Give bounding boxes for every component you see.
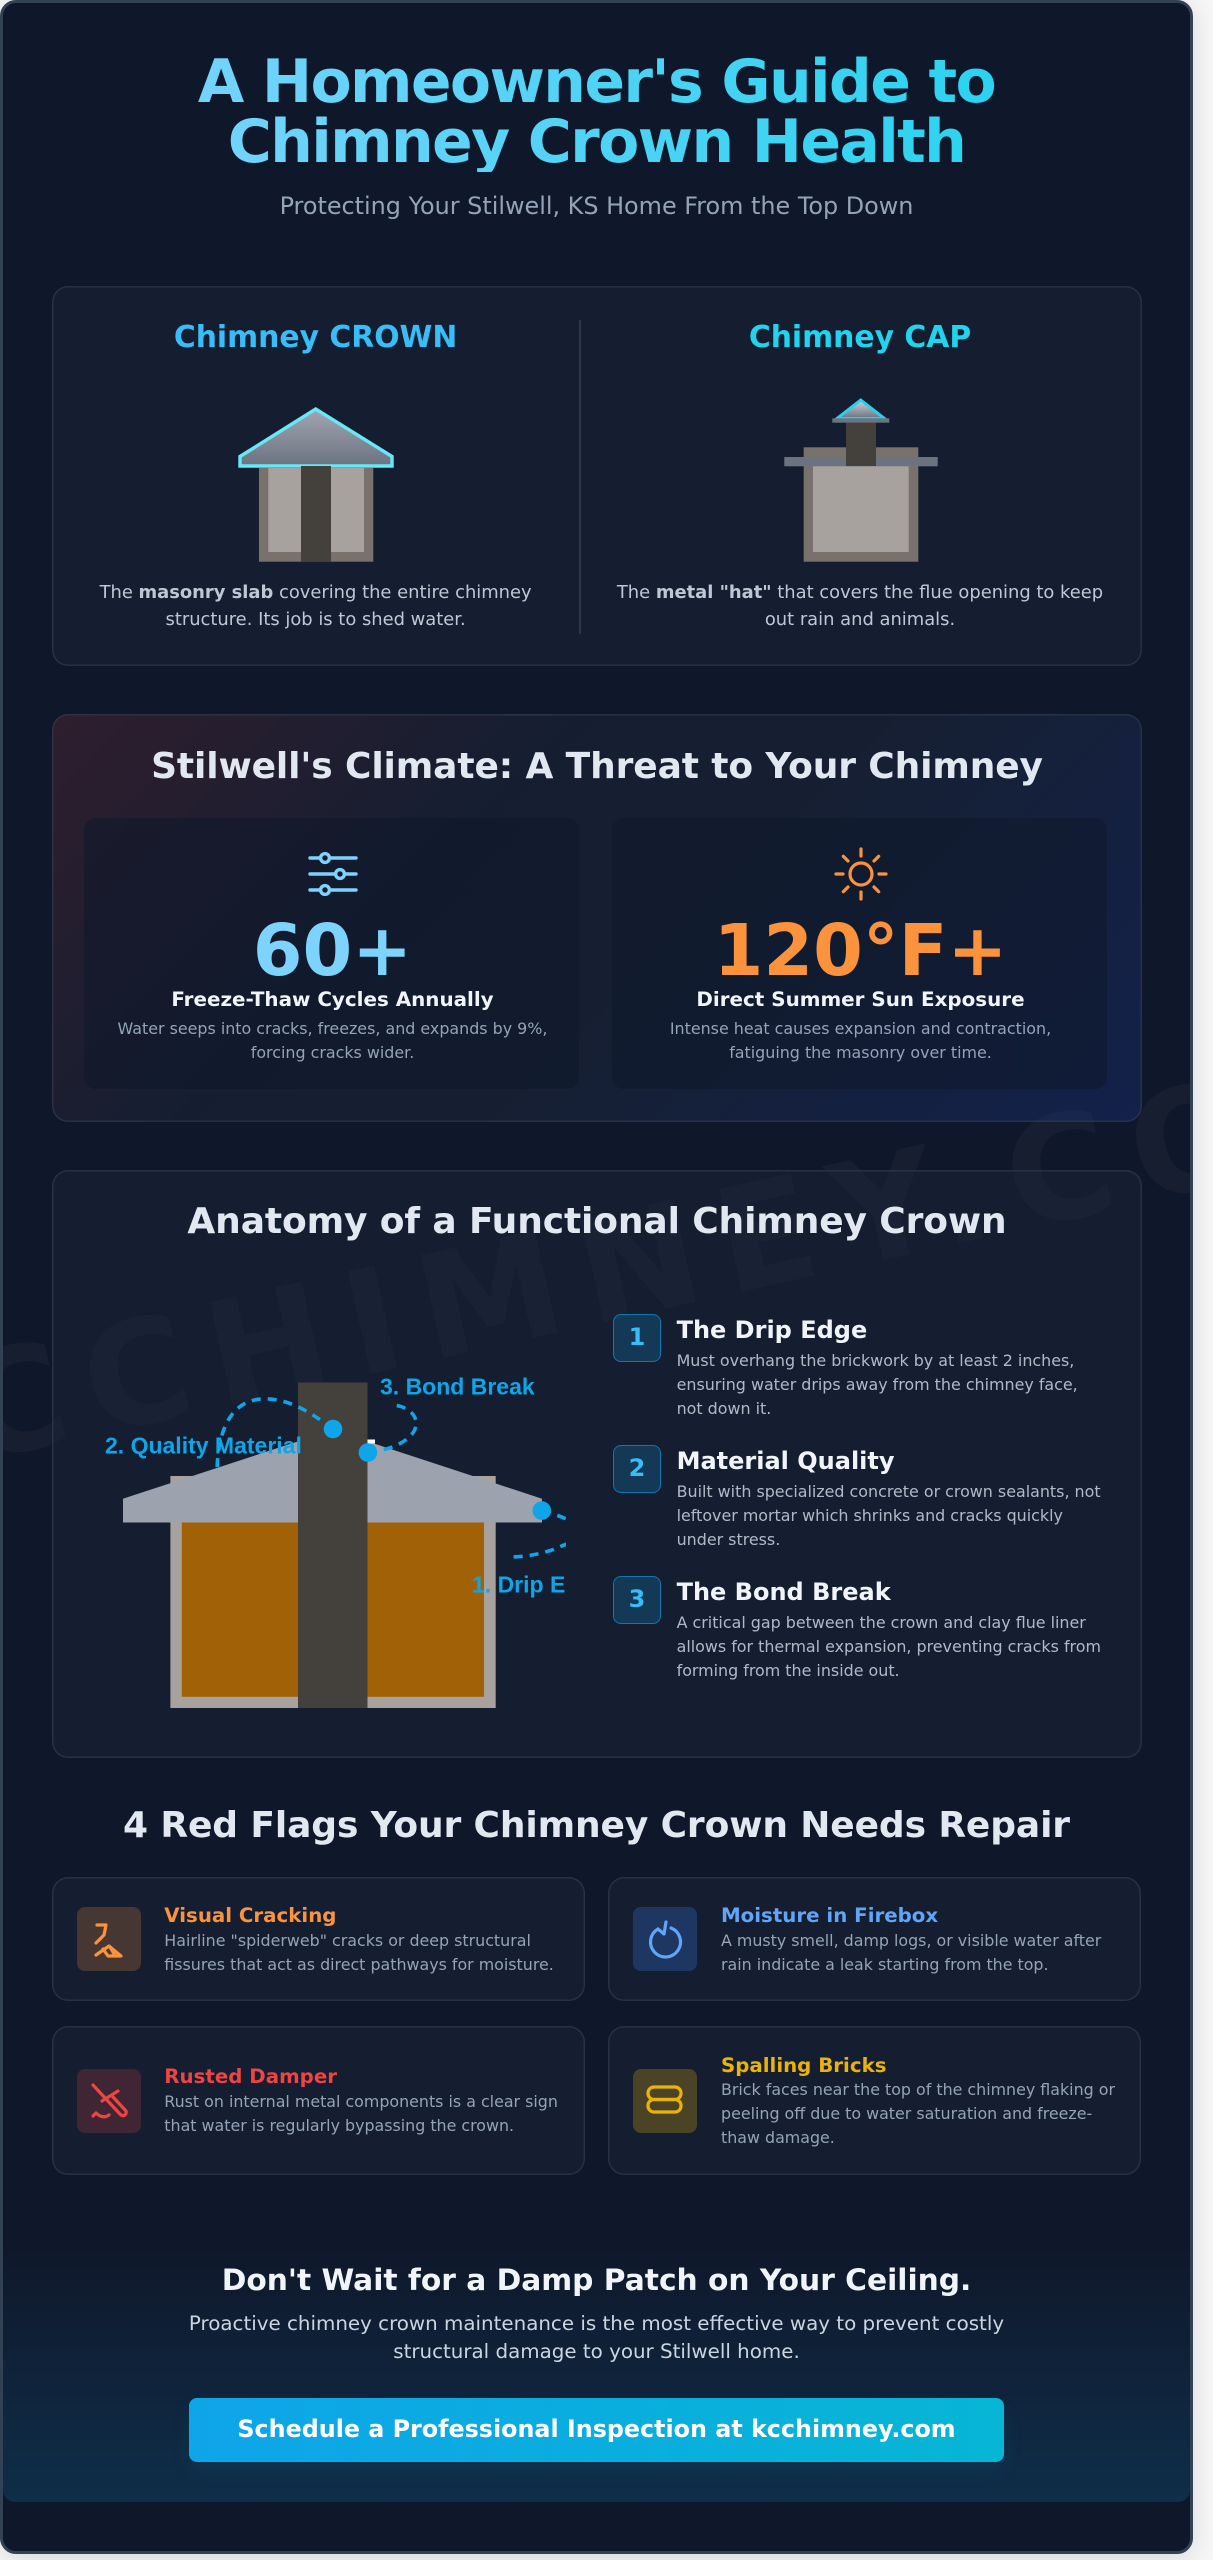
text	[721, 2080, 1115, 2147]
subtitle: Protecting Your Stilwell, KS Home From the Top Down	[280, 192, 913, 220]
icon: chimney crown	[238, 407, 394, 562]
stat description	[118, 1019, 547, 1062]
text: fissures that act as direct pathways for moisture.	[164, 1955, 554, 1974]
stat number: 120F+: 120°F+	[714, 908, 1007, 992]
text: that water is regularly bypassing the crown.	[164, 2116, 514, 2135]
diagram: chimney crown cross-section: 2. Quality Material	[105, 1432, 302, 1458]
diagram: chimney crown cross-section	[105, 1373, 566, 1708]
text	[164, 2092, 558, 2135]
number badge: 3	[629, 1585, 645, 1613]
panel: climate	[52, 714, 1142, 1122]
stat card: sun exposure	[612, 818, 1107, 1089]
number badge	[613, 1576, 661, 1624]
number badge	[613, 1314, 661, 1362]
title: Chimney Crown Health	[228, 107, 965, 177]
cta text	[189, 2312, 1004, 2363]
step text	[676, 1613, 1101, 1680]
step title: The Bond Break	[677, 1578, 891, 1606]
stat number: 60+: 60+	[253, 908, 412, 992]
number badge: 1	[629, 1323, 645, 1351]
heading: chimney crown: Chimney CROWN	[174, 320, 457, 355]
title: Spalling Bricks	[721, 2054, 886, 2077]
step text: not down it.	[677, 1399, 771, 1418]
stat description	[670, 1019, 1051, 1062]
cta text: Proactive chimney crown maintenance is the most effective way to prevent costly	[189, 2312, 1004, 2335]
step text: under stress.	[677, 1530, 780, 1549]
icon: bricks	[633, 2069, 697, 2133]
stat card: freeze-thaw	[84, 818, 579, 1089]
card: spalling bricks	[608, 2026, 1141, 2175]
step text	[677, 1482, 1101, 1549]
text: crown description: structure. Its job is to shed water.	[166, 609, 466, 630]
cta button: Schedule a Professional Inspection at kcchimney.com	[237, 2415, 956, 2443]
icon: crack	[77, 1907, 141, 1971]
card: moisture in firebox	[608, 1877, 1141, 2001]
title: Moisture in Firebox	[721, 1904, 938, 1927]
step title: The Drip Edge	[677, 1316, 867, 1344]
cta button	[189, 2398, 1004, 2462]
title: Rusted Damper	[164, 2065, 337, 2088]
title: Visual Cracking	[164, 1904, 336, 1927]
cta text: structural damage to your Stilwell home.	[393, 2340, 800, 2363]
panel: anatomy	[52, 1170, 1142, 1758]
text: rain indicate a leak starting from the top.	[721, 1955, 1049, 1974]
number badge: 2	[629, 1454, 645, 1482]
heading: climate: Stilwell's Climate: A Threat to Your Chimney	[151, 746, 1043, 787]
step text: forming from the inside out.	[677, 1661, 900, 1680]
icon: rust	[77, 2069, 141, 2133]
title	[100, 52, 1093, 172]
cta heading: Don't Wait for a Damp Patch on Your Ceiling.	[222, 2263, 971, 2298]
step text: Must overhang the brickwork by at least 2 inches,	[677, 1351, 1074, 1370]
heading: chimney cap: Chimney CAP	[749, 320, 971, 355]
step text: A critical gap between the crown and clay flue liner	[677, 1613, 1086, 1632]
text: Rust on internal metal components is a clear sign	[164, 2092, 558, 2111]
heading: anatomy: Anatomy of a Functional Chimney Crown	[187, 1200, 1007, 1242]
text: peeling off due to water saturation and freeze-	[721, 2104, 1092, 2123]
text: crown description: The masonry slab covering the entire chimney	[100, 582, 532, 602]
stat label: Freeze-Thaw Cycles Annually	[171, 988, 494, 1011]
text: Hairline "spiderweb" cracks or deep structural	[164, 1931, 531, 1950]
call to action panel	[3, 2240, 1190, 2502]
stat description: Water seeps into cracks, freezes, and expands by 9%,	[118, 1019, 547, 1038]
stat description: fatiguing the masonry over time.	[729, 1043, 992, 1062]
step 2: material quality	[613, 1445, 1101, 1549]
step text: ensuring water drips away from the chimney face,	[677, 1375, 1078, 1394]
text: thaw damage.	[721, 2128, 835, 2147]
stat label: Direct Summer Sun Exposure	[696, 988, 1025, 1011]
text: Brick faces near the top of the chimney flaking or	[721, 2080, 1115, 2099]
icon: flame ring	[633, 1907, 697, 1971]
divider	[579, 320, 580, 634]
icon: sliders	[308, 852, 358, 896]
text	[721, 1931, 1102, 1974]
text: crown description	[100, 582, 532, 630]
text	[164, 1931, 554, 1974]
step title: Material Quality	[677, 1447, 895, 1475]
text: cap description: out rain and animals.	[765, 609, 955, 630]
step 1: drip edge	[613, 1314, 1078, 1418]
panel: crown vs cap	[52, 286, 1142, 666]
text: A musty smell, damp logs, or visible water after	[721, 1931, 1101, 1950]
step 3: bond break	[613, 1576, 1101, 1680]
step text: leftover mortar which shrinks and cracks quickly	[677, 1506, 1063, 1525]
icon: chimney cap	[784, 398, 938, 562]
step text: allows for thermal expansion, preventing cracks from	[677, 1637, 1101, 1656]
card: visual cracking	[52, 1877, 585, 2001]
step text	[677, 1351, 1078, 1418]
stat description: Intense heat causes expansion and contraction,	[670, 1019, 1051, 1038]
diagram: chimney crown cross-section: 3. Bond Break	[380, 1373, 535, 1399]
step text: Built with specialized concrete or crown sealants, not	[677, 1482, 1101, 1501]
icon: sun	[834, 847, 888, 901]
heading: red flags: 4 Red Flags Your Chimney Crown Needs Repair	[123, 1805, 1070, 1846]
number badge	[613, 1445, 661, 1493]
text: cap description	[616, 582, 1103, 630]
card: rusted damper	[52, 2026, 585, 2175]
text: cap description: The metal "hat" that covers the flue opening to keep	[617, 582, 1103, 602]
title: A Homeowner's Guide to	[198, 47, 995, 117]
stat description: forcing cracks wider.	[251, 1043, 414, 1062]
